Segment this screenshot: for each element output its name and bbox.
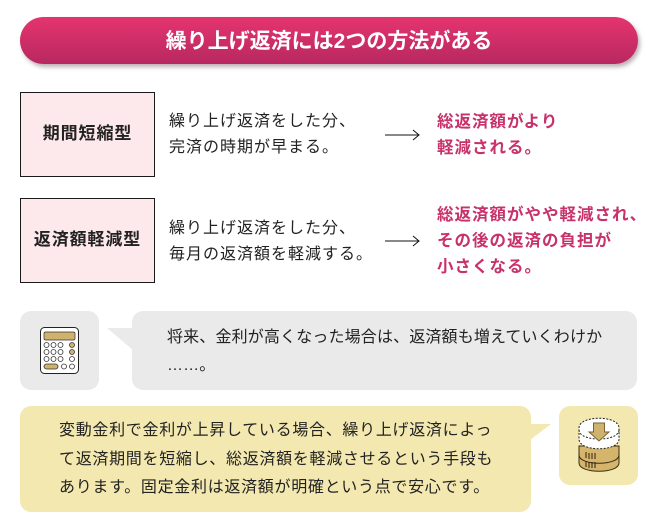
row 1 label: 期間短縮型: 期間短縮型 bbox=[43, 124, 132, 143]
question text: ……。 bbox=[167, 357, 215, 374]
row 1 description: 完済の時期が早まる。 bbox=[169, 139, 339, 156]
row 1 result: 総返済額がより bbox=[437, 113, 558, 131]
question text: 将来、金利が高くなった場合は、返済額も増えていくわけか bbox=[167, 329, 602, 346]
icon: coin stack with down arrow bbox=[559, 406, 638, 485]
row 2 arrow bbox=[385, 236, 420, 246]
answer text: 変動金利で金利が上昇している場合、繰り上げ返済によっ bbox=[59, 422, 492, 439]
answer text bbox=[59, 421, 493, 496]
row 1 arrow bbox=[385, 130, 420, 140]
row 2 description: 毎月の返済額を軽減する。 bbox=[169, 246, 373, 263]
speech bubble: answer bbox=[20, 406, 551, 512]
row 2 result: 総返済額がやや軽減され、 bbox=[437, 206, 647, 224]
answer text: あります。固定金利は返済額が明確という点で安心です。 bbox=[59, 479, 490, 496]
row 1 result: 軽減される。 bbox=[437, 139, 542, 157]
row 2 result: その後の返済の負担が bbox=[437, 232, 612, 250]
icon: calculator bbox=[20, 311, 99, 390]
row 2 description: 繰り上げ返済をした分、 bbox=[169, 220, 356, 237]
row 1 result bbox=[437, 112, 558, 157]
row 2 result bbox=[437, 206, 647, 276]
row 1 label: 期間短縮型 bbox=[20, 92, 155, 177]
row 2 label: 返済額軽減型: 返済額軽減型 bbox=[34, 230, 141, 249]
answer text: て返済期間を短縮し、総返済額を軽減させるという手段も bbox=[59, 450, 493, 468]
title banner: 繰り上げ返済には2つの方法がある bbox=[166, 30, 492, 53]
speech bubble: question bbox=[107, 311, 637, 390]
row 1 description: 繰り上げ返済をした分、 bbox=[169, 113, 356, 130]
row 2 label: 返済額軽減型 bbox=[20, 198, 155, 283]
row 2 description bbox=[169, 219, 373, 263]
question text bbox=[167, 328, 602, 374]
row 1 description bbox=[169, 112, 356, 156]
row 2 result: 小さくなる。 bbox=[437, 258, 542, 276]
title banner bbox=[20, 17, 638, 64]
